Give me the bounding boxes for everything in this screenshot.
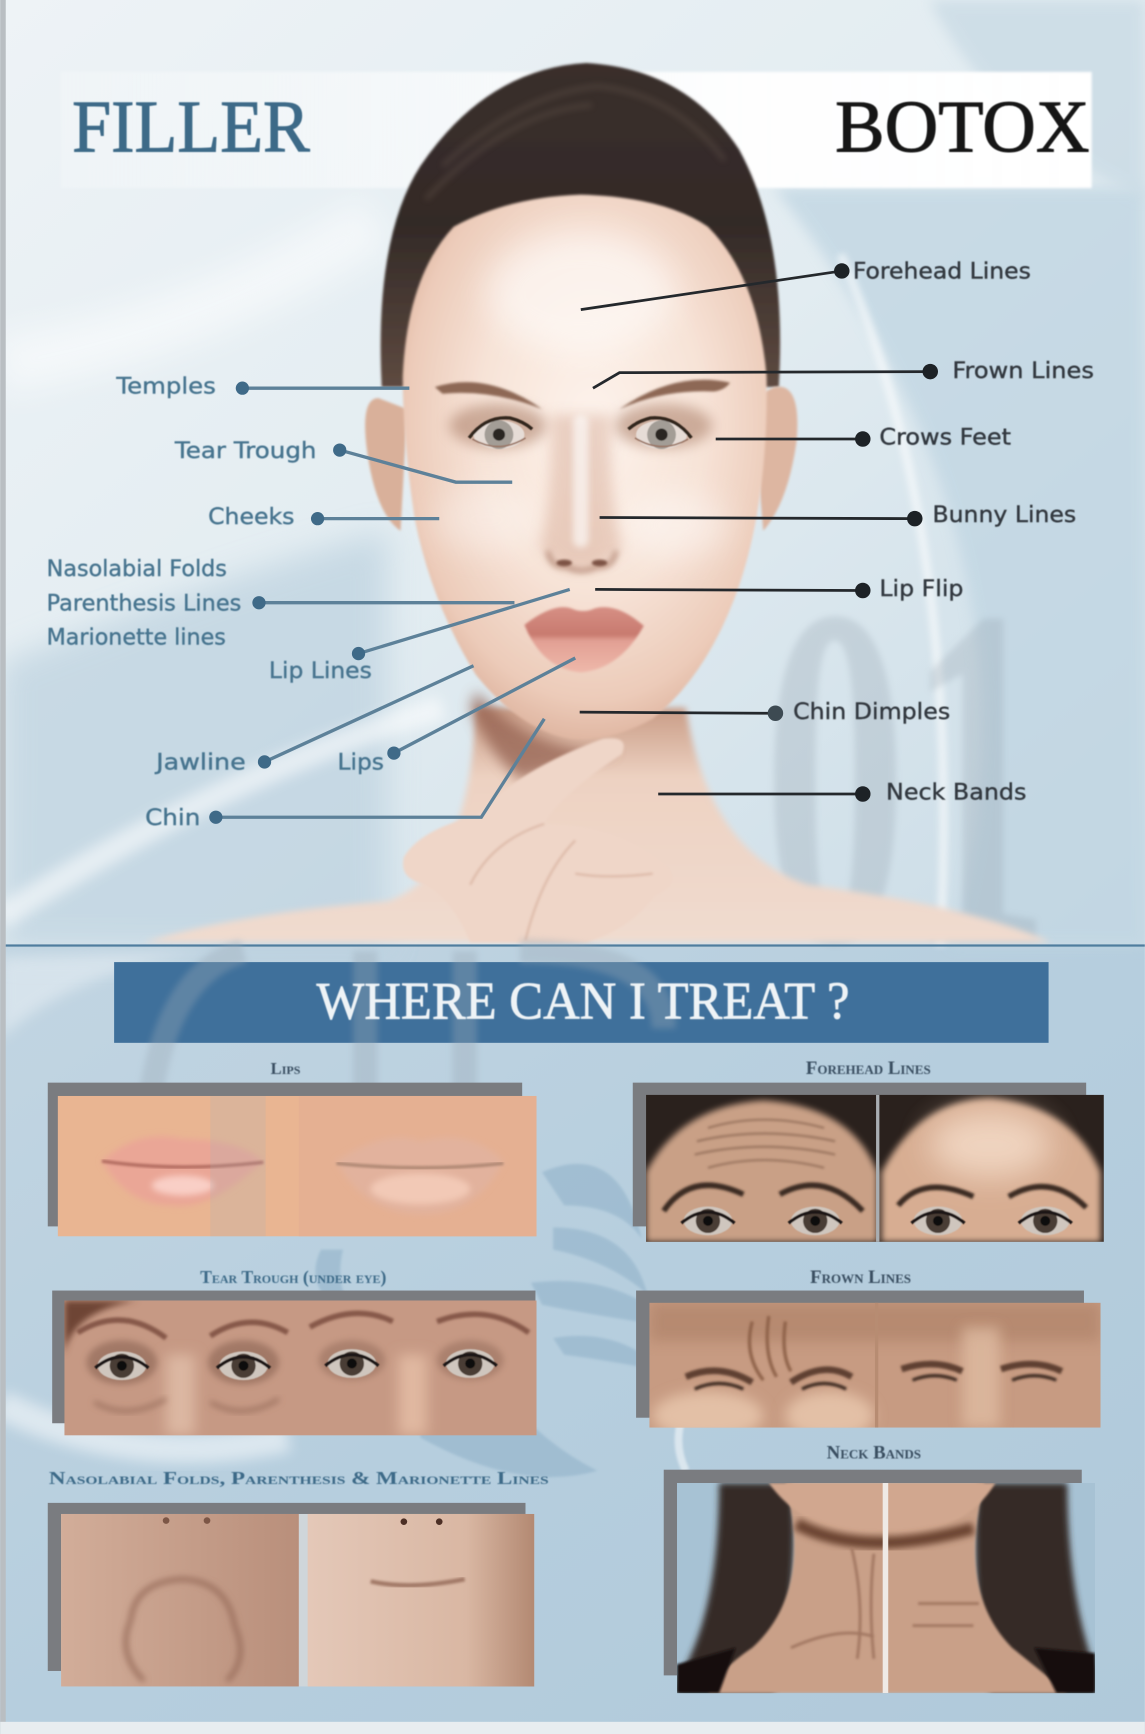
caption: Neck Bands	[827, 1443, 921, 1464]
callout: bunny lines	[600, 502, 1076, 528]
after mouth	[371, 1579, 465, 1585]
before mouth and folds	[126, 1579, 240, 1681]
callout: lip lines	[269, 589, 570, 684]
callout: chin dimples: Chin Dimples	[793, 699, 950, 725]
neck skin	[708, 1483, 1067, 1693]
white title band	[61, 72, 1092, 188]
frown wrinkles	[749, 1316, 791, 1380]
caption: Tear Trough (under eye)	[200, 1267, 387, 1287]
callout: lip lines: Lip Lines	[269, 658, 372, 684]
callout: forehead lines: Forehead Lines	[853, 259, 1031, 285]
left brow	[435, 382, 542, 409]
panel: neck bands	[664, 1443, 1095, 1693]
nose highlight	[573, 415, 589, 547]
callout: lip flip: Lip Flip	[879, 576, 963, 602]
right brow	[619, 380, 730, 409]
divider line	[6, 944, 1145, 947]
callout: nasolabial, parenthesis, marionette: Marionette lines	[47, 625, 226, 651]
brows	[664, 1185, 1086, 1211]
callout: lip flip	[595, 576, 963, 602]
callout: temples: Temples	[115, 374, 216, 400]
cheek highlights	[619, 492, 730, 558]
before lips	[102, 1136, 263, 1206]
panel: forehead lines	[633, 1058, 1104, 1242]
brows	[78, 1313, 529, 1338]
nostrils	[163, 1517, 169, 1524]
callout: chin dimples	[580, 699, 950, 725]
forehead highlight	[487, 232, 675, 354]
hair	[677, 1483, 1095, 1693]
watermark overlay	[210, 1096, 266, 1236]
callout: chin: Chin	[145, 805, 200, 831]
nose tip	[548, 551, 616, 571]
after lips	[342, 1140, 499, 1212]
botox callouts	[580, 259, 1094, 806]
callout: nasolabial, parenthesis, marionette: Parenthesis Lines	[47, 590, 241, 616]
caption: Frown Lines	[810, 1267, 911, 1288]
panel: tear trough	[52, 1267, 537, 1435]
brows	[686, 1364, 1062, 1382]
chin	[769, 1483, 995, 1532]
under-eye bags	[94, 1399, 279, 1411]
callout: jawline	[154, 666, 474, 776]
callout: tear trough	[174, 438, 512, 482]
callout: neck bands	[658, 780, 1026, 806]
callout: bunny lines: Bunny Lines	[932, 502, 1076, 528]
portrait of woman	[144, 63, 1051, 942]
heading: where can i treat: WHERE CAN I TREAT ?	[316, 973, 850, 1031]
callout: frown lines	[593, 358, 1094, 388]
callout: nasolabial, parenthesis, marionette	[47, 556, 514, 651]
eyes	[95, 1351, 148, 1380]
banner watermark script	[150, 951, 664, 1106]
caption: Nasolabial Folds, Parenthesis & Marionette Lines	[49, 1468, 549, 1488]
hand	[403, 738, 673, 942]
caption: Lips	[271, 1059, 301, 1078]
callout: crows feet	[716, 425, 1011, 451]
nostrils	[556, 560, 572, 566]
title: botox: BOTOX	[835, 87, 1089, 169]
callout: forehead lines	[581, 259, 1031, 310]
title: filler: FILLER	[72, 87, 310, 169]
callout: tear trough: Tear Trough	[174, 438, 316, 464]
callout: cheeks	[208, 504, 439, 530]
face	[403, 195, 767, 739]
eye shadow	[86, 1340, 157, 1385]
watermark lion emblem	[315, 1164, 675, 1477]
wrinkles	[695, 1120, 835, 1168]
left ear	[365, 398, 407, 531]
jaw shadow	[470, 691, 619, 780]
right eye	[628, 418, 691, 449]
banner	[114, 951, 1049, 1106]
callout: jawline: Jawline	[154, 750, 246, 776]
callout: lips	[338, 658, 575, 776]
eye socket shadows	[449, 404, 547, 448]
filler callouts	[47, 374, 575, 831]
nose bridge shadow	[540, 415, 622, 570]
eyes	[695, 1376, 1056, 1389]
callout: lips: Lips	[338, 750, 384, 776]
left eye	[469, 418, 532, 449]
caption: Forehead Lines	[806, 1058, 931, 1079]
hair strands	[426, 86, 725, 199]
callout: frown lines: Frown Lines	[952, 358, 1094, 384]
lips	[524, 607, 644, 672]
callout: crows feet: Crows Feet	[879, 425, 1011, 451]
callout: neck bands: Neck Bands	[886, 780, 1026, 806]
eyes	[681, 1207, 735, 1235]
callout: cheeks: Cheeks	[208, 504, 294, 530]
nose highlights	[166, 1355, 195, 1435]
neck wrinkles	[791, 1548, 979, 1659]
shoulders and neck	[144, 708, 1051, 942]
callout: nasolabial, parenthesis, marionette: Nasolabial Folds	[47, 556, 227, 582]
callout: chin	[145, 719, 544, 831]
callout: temples	[115, 374, 409, 400]
hair	[381, 63, 780, 387]
black tops	[677, 1648, 1095, 1693]
right ear	[752, 387, 797, 531]
panel: lips	[48, 1059, 537, 1236]
panel: frown lines	[636, 1267, 1101, 1440]
panel: nasolabial folds	[48, 1468, 549, 1686]
